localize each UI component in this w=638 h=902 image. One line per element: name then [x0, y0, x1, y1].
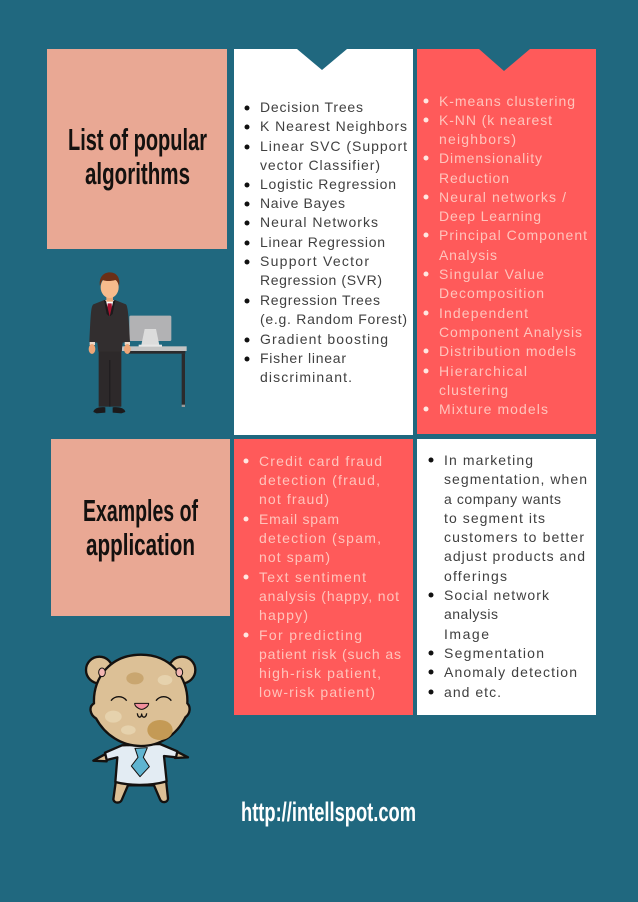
bear hands: [93, 751, 188, 761]
text list: supervised examples: happy): [259, 607, 308, 623]
text list: unsupervised examples: adjust products and: [444, 548, 585, 564]
text list: unsupervised algorithms: Decomposition: [439, 285, 544, 301]
text list: unsupervised algorithms: Reduction: [439, 170, 509, 186]
text list: unsupervised examples: Anomaly detection: [444, 664, 577, 680]
text list: unsupervised examples: segmentation, when: [444, 471, 587, 487]
bear tie: [131, 748, 149, 777]
text list: supervised algorithms: Logistic Regression: [260, 176, 396, 192]
text list: unsupervised algorithms: clustering: [439, 382, 508, 398]
text list: unsupervised algorithms: neighbors): [439, 131, 516, 147]
text list: supervised examples: detection (spam,: [259, 530, 381, 546]
bear inner ears: [99, 668, 183, 677]
text list: supervised examples: Text sentiment: [259, 569, 366, 585]
panel: supervised application examples: [234, 439, 413, 715]
text list: unsupervised examples: Image: [444, 626, 489, 642]
text list: supervised examples: not fraud): [259, 491, 329, 507]
text list: unsupervised algorithms: Mixture models: [439, 401, 548, 417]
bear head: [91, 655, 190, 746]
icon: businessman at desk: [89, 272, 187, 413]
text list: unsupervised algorithms: K-means clustering: [439, 93, 575, 109]
panel: examples of application heading: [51, 439, 230, 616]
text list: supervised algorithms: Linear Regression: [260, 234, 385, 250]
panel: supervised algorithms list: [234, 49, 413, 435]
text list: unsupervised examples: customers to better: [444, 529, 584, 545]
text list: supervised examples: high-risk patient,: [259, 665, 381, 681]
text list: supervised algorithms: [244, 99, 407, 385]
text list: unsupervised algorithms: Component Analysis: [439, 324, 582, 340]
text list: unsupervised examples: analysis: [444, 606, 498, 622]
text list: unsupervised algorithms: Independent: [439, 305, 528, 321]
computer monitor: [129, 316, 171, 347]
bear fur mottling: [105, 672, 173, 740]
heading: examples of application: application: [86, 527, 195, 562]
man: [89, 272, 131, 413]
notch: [479, 49, 530, 71]
text list: unsupervised examples: to segment its: [444, 510, 545, 526]
text list: unsupervised algorithms: Dimensionality: [439, 150, 542, 166]
text list: unsupervised examples: Segmentation: [444, 645, 544, 661]
text list: supervised examples: Credit card fraud: [259, 453, 382, 469]
panel: list of popular algorithms heading: [47, 49, 227, 249]
text list: supervised algorithms: Support Vector: [260, 253, 369, 269]
text list: supervised algorithms: Regression (SVR): [260, 272, 382, 288]
heading: list of popular algorithms: algorithms: [85, 156, 190, 191]
text list: supervised algorithms: Neural Networks: [260, 214, 378, 230]
text list: unsupervised examples: offerings: [444, 568, 507, 584]
source url: http://intellspot.com: [241, 797, 416, 827]
heading: examples of application: [83, 493, 198, 562]
panel: unsupervised algorithms list: [417, 49, 596, 434]
text list: unsupervised examples: [428, 452, 587, 700]
text list: unsupervised examples: and etc.: [444, 684, 501, 700]
panel: unsupervised application examples: [417, 439, 596, 715]
text list: supervised algorithms: Gradient boosting: [260, 331, 388, 347]
text list: supervised algorithms: K Nearest Neighbors: [260, 118, 407, 134]
bear ears: [86, 657, 195, 683]
text list: unsupervised algorithms: Hierarchical: [439, 363, 527, 379]
heading: list of popular algorithms: List of popular: [68, 122, 207, 157]
text list: supervised algorithms: Regression Trees: [260, 292, 380, 308]
text list: unsupervised algorithms: Analysis: [439, 247, 497, 263]
text list: unsupervised algorithms: K-NN (k nearest: [439, 112, 552, 128]
text list: supervised examples: patient risk (such as: [259, 646, 401, 662]
text list: supervised algorithms: (e.g. Random Forest): [260, 311, 407, 327]
text list: unsupervised algorithms: Neural networks /: [439, 189, 566, 205]
text list: supervised algorithms: Linear SVC (Support: [260, 138, 407, 154]
text list: supervised examples: not spam): [259, 549, 330, 565]
notch: [297, 49, 347, 70]
text list: supervised examples: Email spam: [259, 511, 339, 527]
icon: bear in shirt and tie: [86, 655, 195, 803]
text list: unsupervised examples: Social network: [444, 587, 550, 603]
bear legs: [113, 780, 168, 803]
heading: examples of application: Examples of: [83, 493, 198, 528]
text list: supervised examples: [244, 453, 401, 700]
text list: supervised examples: analysis (happy, not: [259, 588, 399, 604]
text list: supervised algorithms: vector Classifier): [260, 157, 380, 173]
bear face: [111, 697, 171, 717]
text list: unsupervised algorithms: Principal Component: [439, 227, 587, 243]
text list: unsupervised examples: In marketing: [444, 452, 533, 468]
text list: unsupervised examples: a company wants: [444, 491, 561, 507]
text list: unsupervised algorithms: Deep Learning: [439, 208, 541, 224]
text list: unsupervised algorithms: Distribution models: [439, 343, 576, 359]
text list: supervised examples: For predicting: [259, 627, 362, 643]
text list: supervised algorithms: discriminant.: [260, 369, 352, 385]
text list: supervised algorithms: Decision Trees: [260, 99, 363, 115]
text list: supervised examples: detection (fraud,: [259, 472, 380, 488]
text list: unsupervised algorithms: [424, 93, 587, 417]
text list: supervised algorithms: Naive Bayes: [260, 195, 345, 211]
text list: supervised algorithms: Fisher linear: [260, 350, 346, 366]
text list: unsupervised algorithms: Singular Value: [439, 266, 544, 282]
text list: supervised examples: low-risk patient): [259, 684, 375, 700]
desk: [122, 346, 187, 407]
bear shirt: [105, 744, 177, 785]
heading: list of popular algorithms: [68, 122, 207, 191]
